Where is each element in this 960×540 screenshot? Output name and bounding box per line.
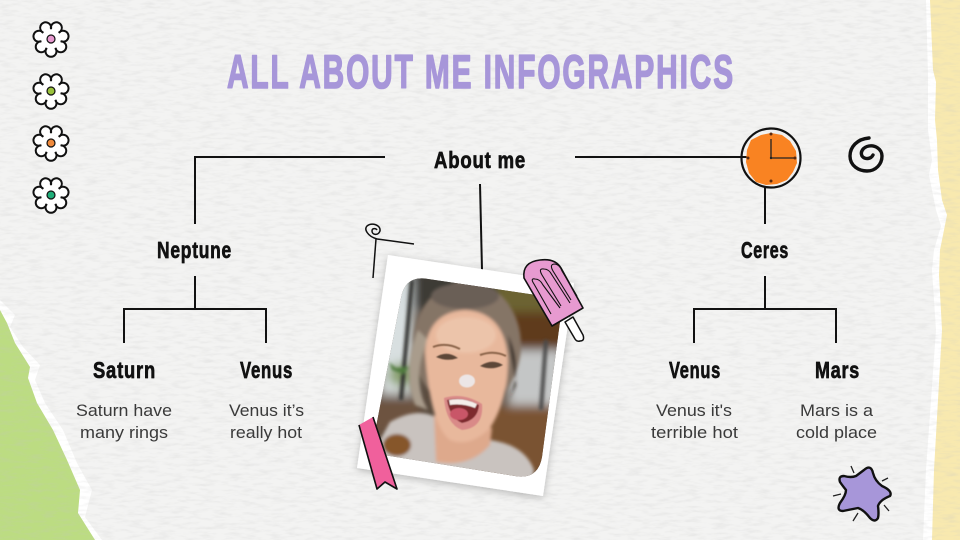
branch: Neptune <box>76 237 304 442</box>
text: Mars description: Mars is a <box>800 401 874 420</box>
white card <box>357 255 574 496</box>
mouth <box>444 396 482 430</box>
text: Mars description: cold place <box>796 423 877 442</box>
heading: Saturn: Saturn <box>93 357 156 383</box>
photo: laughing girl <box>376 278 560 477</box>
heading: Venus: Venus <box>669 357 721 383</box>
branch: Ceres <box>651 237 877 442</box>
icon: orange clock <box>742 128 800 188</box>
icon: spiral <box>850 138 882 171</box>
eyes <box>436 354 458 360</box>
nose with cream <box>459 374 475 388</box>
heading: Mars: Mars <box>815 357 860 383</box>
heading: Venus: Venus <box>240 357 293 383</box>
heading: Ceres: Ceres <box>741 237 789 263</box>
hair <box>412 283 522 390</box>
panel: yellow torn paper right <box>923 0 960 540</box>
icon: purple star <box>833 466 891 521</box>
panel: green torn paper left <box>0 300 102 540</box>
neck <box>434 415 492 463</box>
heading: about me: About me <box>434 147 526 173</box>
icon: flower orange <box>33 126 69 161</box>
connector lines <box>124 157 836 343</box>
icon: flower pink <box>33 22 69 57</box>
food <box>383 434 411 456</box>
text: Saturn description: many rings <box>80 423 168 442</box>
heading: Neptune: Neptune <box>157 237 232 263</box>
face <box>425 310 508 442</box>
icon: popsicle <box>524 260 584 341</box>
icon: pink ribbon <box>359 417 397 489</box>
shirt <box>380 410 536 476</box>
text: Venus description: Venus it’s <box>229 401 304 420</box>
icon: flower teal <box>33 178 69 213</box>
icon: flower column <box>33 22 69 213</box>
icon: pin scribble <box>366 224 414 278</box>
icon: flower green <box>33 74 69 109</box>
text: Venus description: Venus it's <box>656 401 732 420</box>
polaroid photo card <box>357 255 584 496</box>
text: Venus description: really hot <box>230 423 302 442</box>
text: Venus description: terrible hot <box>651 423 738 442</box>
text: Saturn description: Saturn have <box>76 401 172 420</box>
